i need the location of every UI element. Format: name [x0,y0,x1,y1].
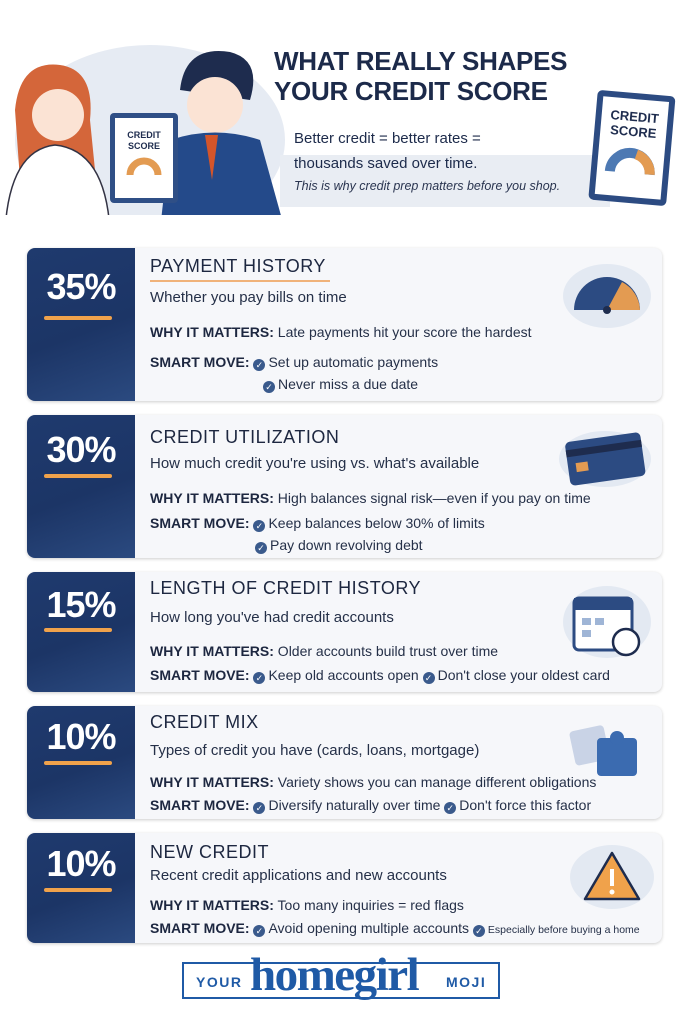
icon: clipboard credit score [588,90,676,206]
icon: warning [570,845,654,909]
panel: length of credit history [27,572,662,692]
title: WHAT REALLY SHAPES [274,46,567,76]
panel: credit utilization: ✓ [257,543,265,553]
panel: payment history: WHY IT MATTERS: Late payments hit your score the hardest [150,324,532,340]
panel: credit mix: Types of credit you have (cards, loans, mortgage) [150,742,479,759]
panel: credit mix: SMART MOVE: Diversify naturally over time Don't force this factor [150,797,591,813]
panel: credit utilization: Pay down revolving debt [270,537,423,553]
panel: length of credit history: 15% [46,584,116,625]
panel: credit mix [27,706,662,819]
icon: credit card [559,431,651,487]
title: YOUR CREDIT SCORE [274,76,548,106]
panel: length of credit history: ✓ [256,673,263,683]
header illustration [6,45,285,215]
panel: length of credit history: WHY IT MATTERS: Older accounts build trust over time [150,643,498,659]
panel: credit utilization [27,415,662,558]
logo: YOUR [196,974,242,990]
panel: length of credit history: How long you've had credit accounts [150,609,394,626]
tagline: Better credit = better rates = [294,130,481,147]
panel: new credit [27,833,662,943]
panel: credit utilization: WHY IT MATTERS: High balances signal risk—even if you pay on time [150,490,591,506]
panel: new credit: 10% [46,843,116,884]
logo: homegirl [250,949,418,1001]
icon: calendar [563,586,651,658]
panel: new credit: ✓ [475,926,483,936]
panel: credit mix: ✓ [256,803,263,813]
subtitle band [280,155,610,207]
icon: clipboard credit score: CREDIT [610,107,659,126]
icon: clipboard credit score: SCORE [610,122,657,141]
logo: MOJI [446,974,486,990]
logo [182,962,500,999]
panel: credit mix: WHY IT MATTERS: Variety shows you can manage different obligations [150,774,596,790]
panel: new credit: WHY IT MATTERS: Too many inquiries = red flags [150,897,464,913]
panel: new credit: NEW CREDIT [150,842,269,862]
header illustration: SCORE [128,141,160,151]
panel: credit mix: ✓ [446,803,454,813]
tagline [294,130,481,172]
panel: payment history: 35% [46,266,116,307]
panel: payment history: PAYMENT HISTORY [150,256,326,276]
panel: credit mix: 10% [46,716,116,757]
panel: length of credit history: LENGTH OF CREDIT HISTORY [150,578,421,598]
title [274,46,567,106]
panel: payment history: Never miss a due date [278,376,418,392]
icon: puzzle [570,725,637,776]
panel: payment history: ✓ [265,382,273,392]
icon: gauge [563,264,651,328]
panel: payment history [27,248,662,401]
panel: length of credit history: ✓ [425,673,432,683]
panel: payment history: SMART MOVE: Set up automatic payments [150,354,438,370]
panel: new credit: Recent credit applications and new accounts [150,867,447,884]
panel: credit utilization: SMART MOVE: Keep balances below 30% of limits [150,515,485,531]
panel: new credit: ✓ [256,926,263,936]
panel: credit mix: CREDIT MIX [150,712,259,732]
panel: payment history: Whether you pay bills on time [150,289,347,306]
italic note: This is why credit prep matters before you shop. [294,179,560,193]
panel: credit utilization: CREDIT UTILIZATION [150,427,339,447]
panel: credit utilization: ✓ [256,521,263,531]
header illustration: CREDIT [127,130,161,140]
panel: new credit: SMART MOVE: Avoid opening multiple accounts Especially before buying a home [150,920,640,936]
panel: length of credit history: SMART MOVE: Keep old accounts open Don't close your oldest card [150,667,610,683]
panel: credit utilization: How much credit you're using vs. what's available [150,455,479,472]
panel: credit utilization: 30% [46,429,116,470]
tagline: thousands saved over time. [294,155,477,172]
panel: payment history: ✓ [256,360,263,370]
